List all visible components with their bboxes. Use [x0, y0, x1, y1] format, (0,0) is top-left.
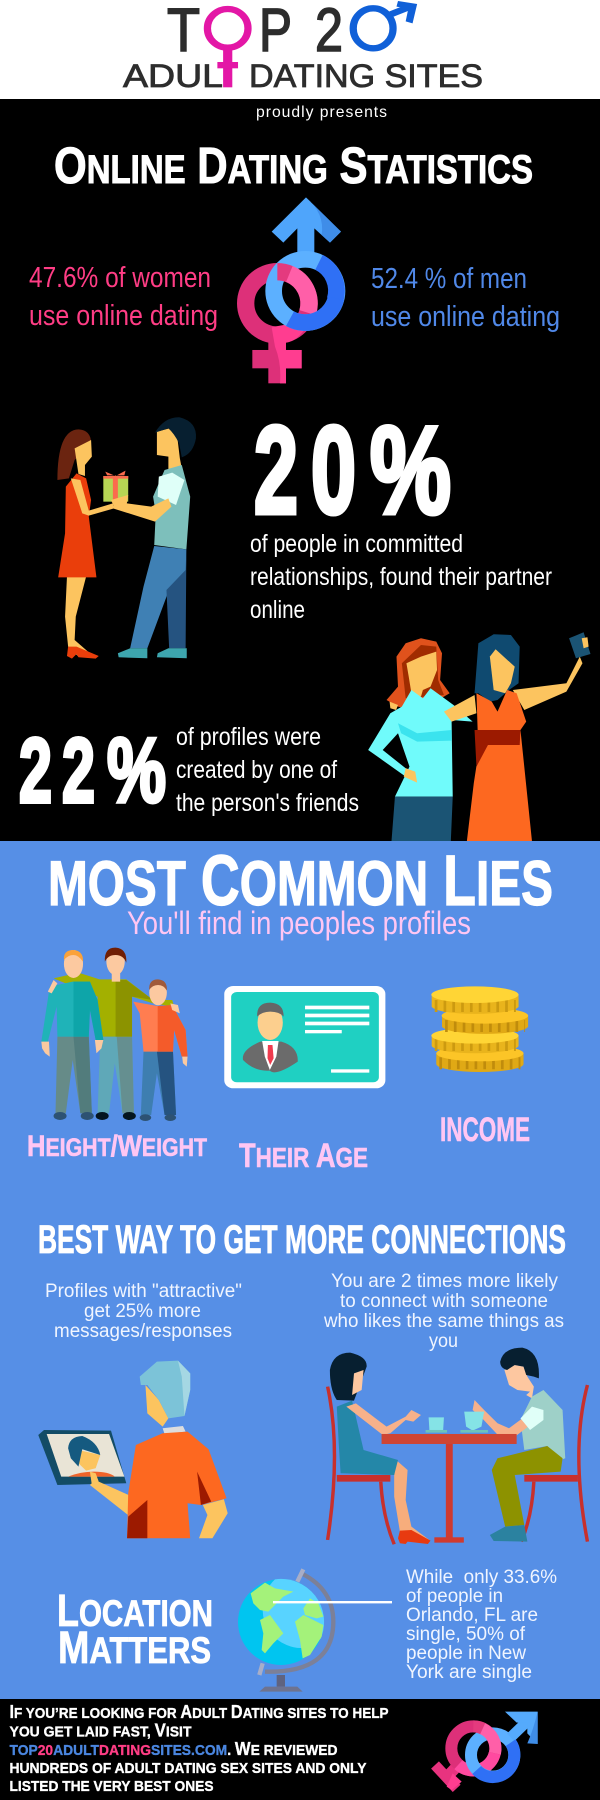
- footer text: [10, 1702, 388, 1795]
- stat: women: 47.6% of women: [29, 262, 211, 294]
- title: ONLINE DATING STATISTICS: [54, 137, 533, 194]
- text: location statistic: [406, 1567, 557, 1683]
- stat: men: use online dating: [371, 301, 560, 333]
- illustration: man viewing tablet: [38, 1361, 228, 1538]
- text: location statistic: single, 50% of: [406, 1624, 526, 1645]
- heading: location matters: LOCATION: [57, 1585, 213, 1636]
- text: attractive profiles: [45, 1281, 242, 1342]
- heading: most common lies: MOST COMMON LIES: [48, 842, 553, 921]
- illustration: couple with gift: [57, 417, 196, 659]
- stat: men: 52.4 % of men: [371, 263, 527, 295]
- icon: ID card: [224, 986, 385, 1088]
- text: profiles created by friends: of profiles were: [176, 723, 321, 751]
- text: committed relationships: online: [250, 596, 305, 624]
- logo: Top 20 Adult Dating Sites: DATING SITES: [249, 58, 483, 94]
- illustration: couple at cafe table: [328, 1348, 587, 1544]
- big number: 22%: %: [107, 720, 166, 822]
- text: location statistic: York are single: [406, 1662, 532, 1683]
- footer text: IF YOU’RE LOOKING FOR ADULT DATING SITES TO HELP: [10, 1702, 388, 1722]
- text: committed relationships: of people in committed: [250, 530, 463, 558]
- logo: Top 20 Adult Dating Sites: ADUL: [123, 58, 223, 94]
- icon: globe: [238, 1569, 333, 1692]
- big number: 22%: [19, 720, 166, 822]
- text: connect with someone: You are 2 times more likely: [331, 1271, 558, 1292]
- big number: 20%: 0: [311, 402, 356, 540]
- text: connect with someone: [323, 1271, 564, 1352]
- footer text: HUNDREDS OF ADULT DATING SEX SITES AND ONLY: [10, 1760, 366, 1777]
- illustration: two friends taking selfie: [368, 632, 591, 841]
- heading: location matters: [57, 1585, 213, 1673]
- heading: location matters: MATTERS: [58, 1622, 211, 1673]
- footer text: YOU GET LAID FAST, VISIT: [10, 1720, 192, 1740]
- text: connect with someone: to connect with someone: [340, 1291, 548, 1312]
- label: income: INCOME: [440, 1111, 530, 1149]
- text: committed relationships: relationships, found their partner: [250, 563, 552, 591]
- text: profiles created by friends: [176, 723, 359, 817]
- text: connect with someone: you: [429, 1331, 458, 1352]
- text: connect with someone: who likes the same things as: [323, 1311, 564, 1332]
- icon: gold coins: [431, 986, 528, 1072]
- big number: 20%: 2: [254, 402, 298, 540]
- text: location statistic: Orlando, FL are: [406, 1605, 538, 1626]
- label: height/weight: HEIGHT/WEIGHT: [27, 1130, 207, 1163]
- big number: 20%: %: [370, 402, 451, 540]
- text: location statistic: While only 33.6%: [406, 1567, 557, 1588]
- icon: three men: [41, 948, 188, 1121]
- footer text: LISTED THE VERY BEST ONES: [10, 1778, 214, 1795]
- logo: Top 20 Adult Dating Sites: [123, 0, 483, 94]
- big number: 22%: 2: [19, 720, 52, 822]
- text: attractive profiles: Profiles with "attractive": [45, 1281, 242, 1302]
- big number: 20%: [254, 402, 451, 540]
- text: committed relationships: [250, 530, 552, 624]
- footer text: TOP20ADULTDATINGSITES.COM. WE REVIEWED: [10, 1739, 338, 1759]
- stat: women: [29, 262, 218, 332]
- connector line: [273, 1601, 392, 1603]
- text: attractive profiles: messages/responses: [54, 1321, 232, 1342]
- text: profiles created by friends: created by one of: [176, 756, 337, 784]
- text: profiles created by friends: the person's friends: [176, 789, 359, 817]
- big number: 22%: 2: [62, 720, 95, 822]
- tagline: proudly presents: [256, 104, 388, 121]
- icon: interlocked gender symbols: [246, 197, 341, 383]
- subheading: You'll find in peoples profiles: [127, 905, 471, 941]
- icon: footer gender symbols: [435, 1712, 538, 1790]
- stat: men: [371, 263, 560, 333]
- text: location statistic: people in New: [406, 1643, 526, 1664]
- stat: women: use online dating: [29, 300, 218, 332]
- label: their age: THEIR AGE: [239, 1137, 368, 1175]
- text: attractive profiles: get 25% more: [84, 1301, 201, 1322]
- text: location statistic: of people in: [406, 1586, 503, 1607]
